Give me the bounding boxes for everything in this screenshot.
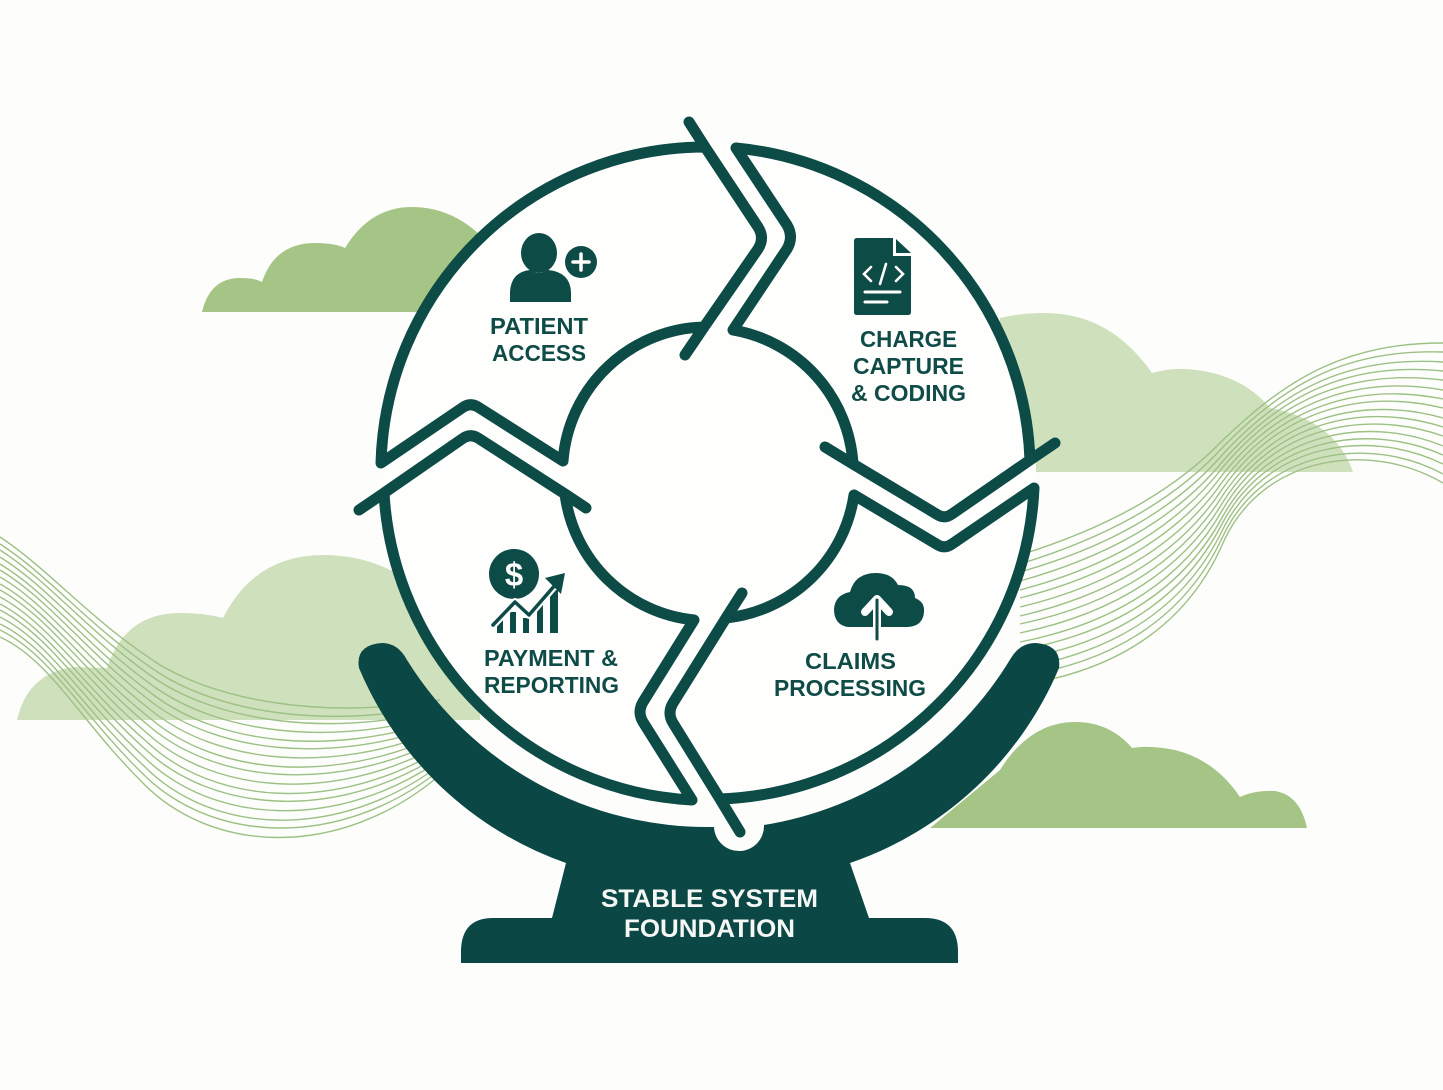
label: charge capture and coding: & CODING — [851, 380, 966, 406]
label: patient access — [490, 313, 589, 366]
segment: patient access — [381, 122, 762, 463]
segment: charge capture and coding — [733, 148, 1055, 517]
segment: payment and reporting — [359, 436, 694, 800]
claims processing arrow outline — [670, 488, 1034, 832]
label: payment and reporting: REPORTING — [484, 672, 619, 698]
icon: person with plus — [510, 233, 599, 302]
patient access arrow outline — [381, 122, 762, 463]
label: payment and reporting — [484, 645, 619, 698]
icon: code document — [854, 238, 911, 315]
cloud: right upper — [1000, 313, 1353, 472]
label: claims processing: CLAIMS — [805, 648, 896, 674]
icon: dollar and rising chart: $ — [505, 556, 523, 593]
base shape — [358, 643, 1059, 963]
base label: STABLE SYSTEM — [601, 885, 818, 913]
label: charge capture and coding — [851, 326, 966, 406]
flowing lines: right wave — [1020, 343, 1443, 685]
label: claims processing: PROCESSING — [774, 675, 926, 701]
payment and reporting arrow outline — [359, 436, 694, 800]
icon: dollar and rising chart — [489, 549, 565, 633]
base: stable system foundation — [358, 643, 1059, 963]
flowing lines: left wave — [0, 537, 440, 838]
label: patient access: PATIENT — [490, 313, 589, 339]
cloud: lower left — [17, 555, 480, 720]
label: payment and reporting: PAYMENT & — [484, 645, 618, 671]
base label: FOUNDATION — [624, 915, 795, 943]
white disc behind the cycle — [378, 144, 1036, 802]
label: patient access: ACCESS — [492, 340, 586, 366]
segment: claims processing — [670, 488, 1034, 832]
icon: cloud upload — [834, 573, 924, 639]
cloud: top left — [202, 207, 480, 312]
charge capture arrow outline — [733, 148, 1055, 517]
label: charge capture and coding: CHARGE — [860, 326, 957, 352]
label: charge capture and coding: CAPTURE — [853, 353, 964, 379]
base label — [601, 885, 818, 943]
label: claims processing — [774, 648, 926, 701]
cloud: lower right — [930, 722, 1307, 828]
